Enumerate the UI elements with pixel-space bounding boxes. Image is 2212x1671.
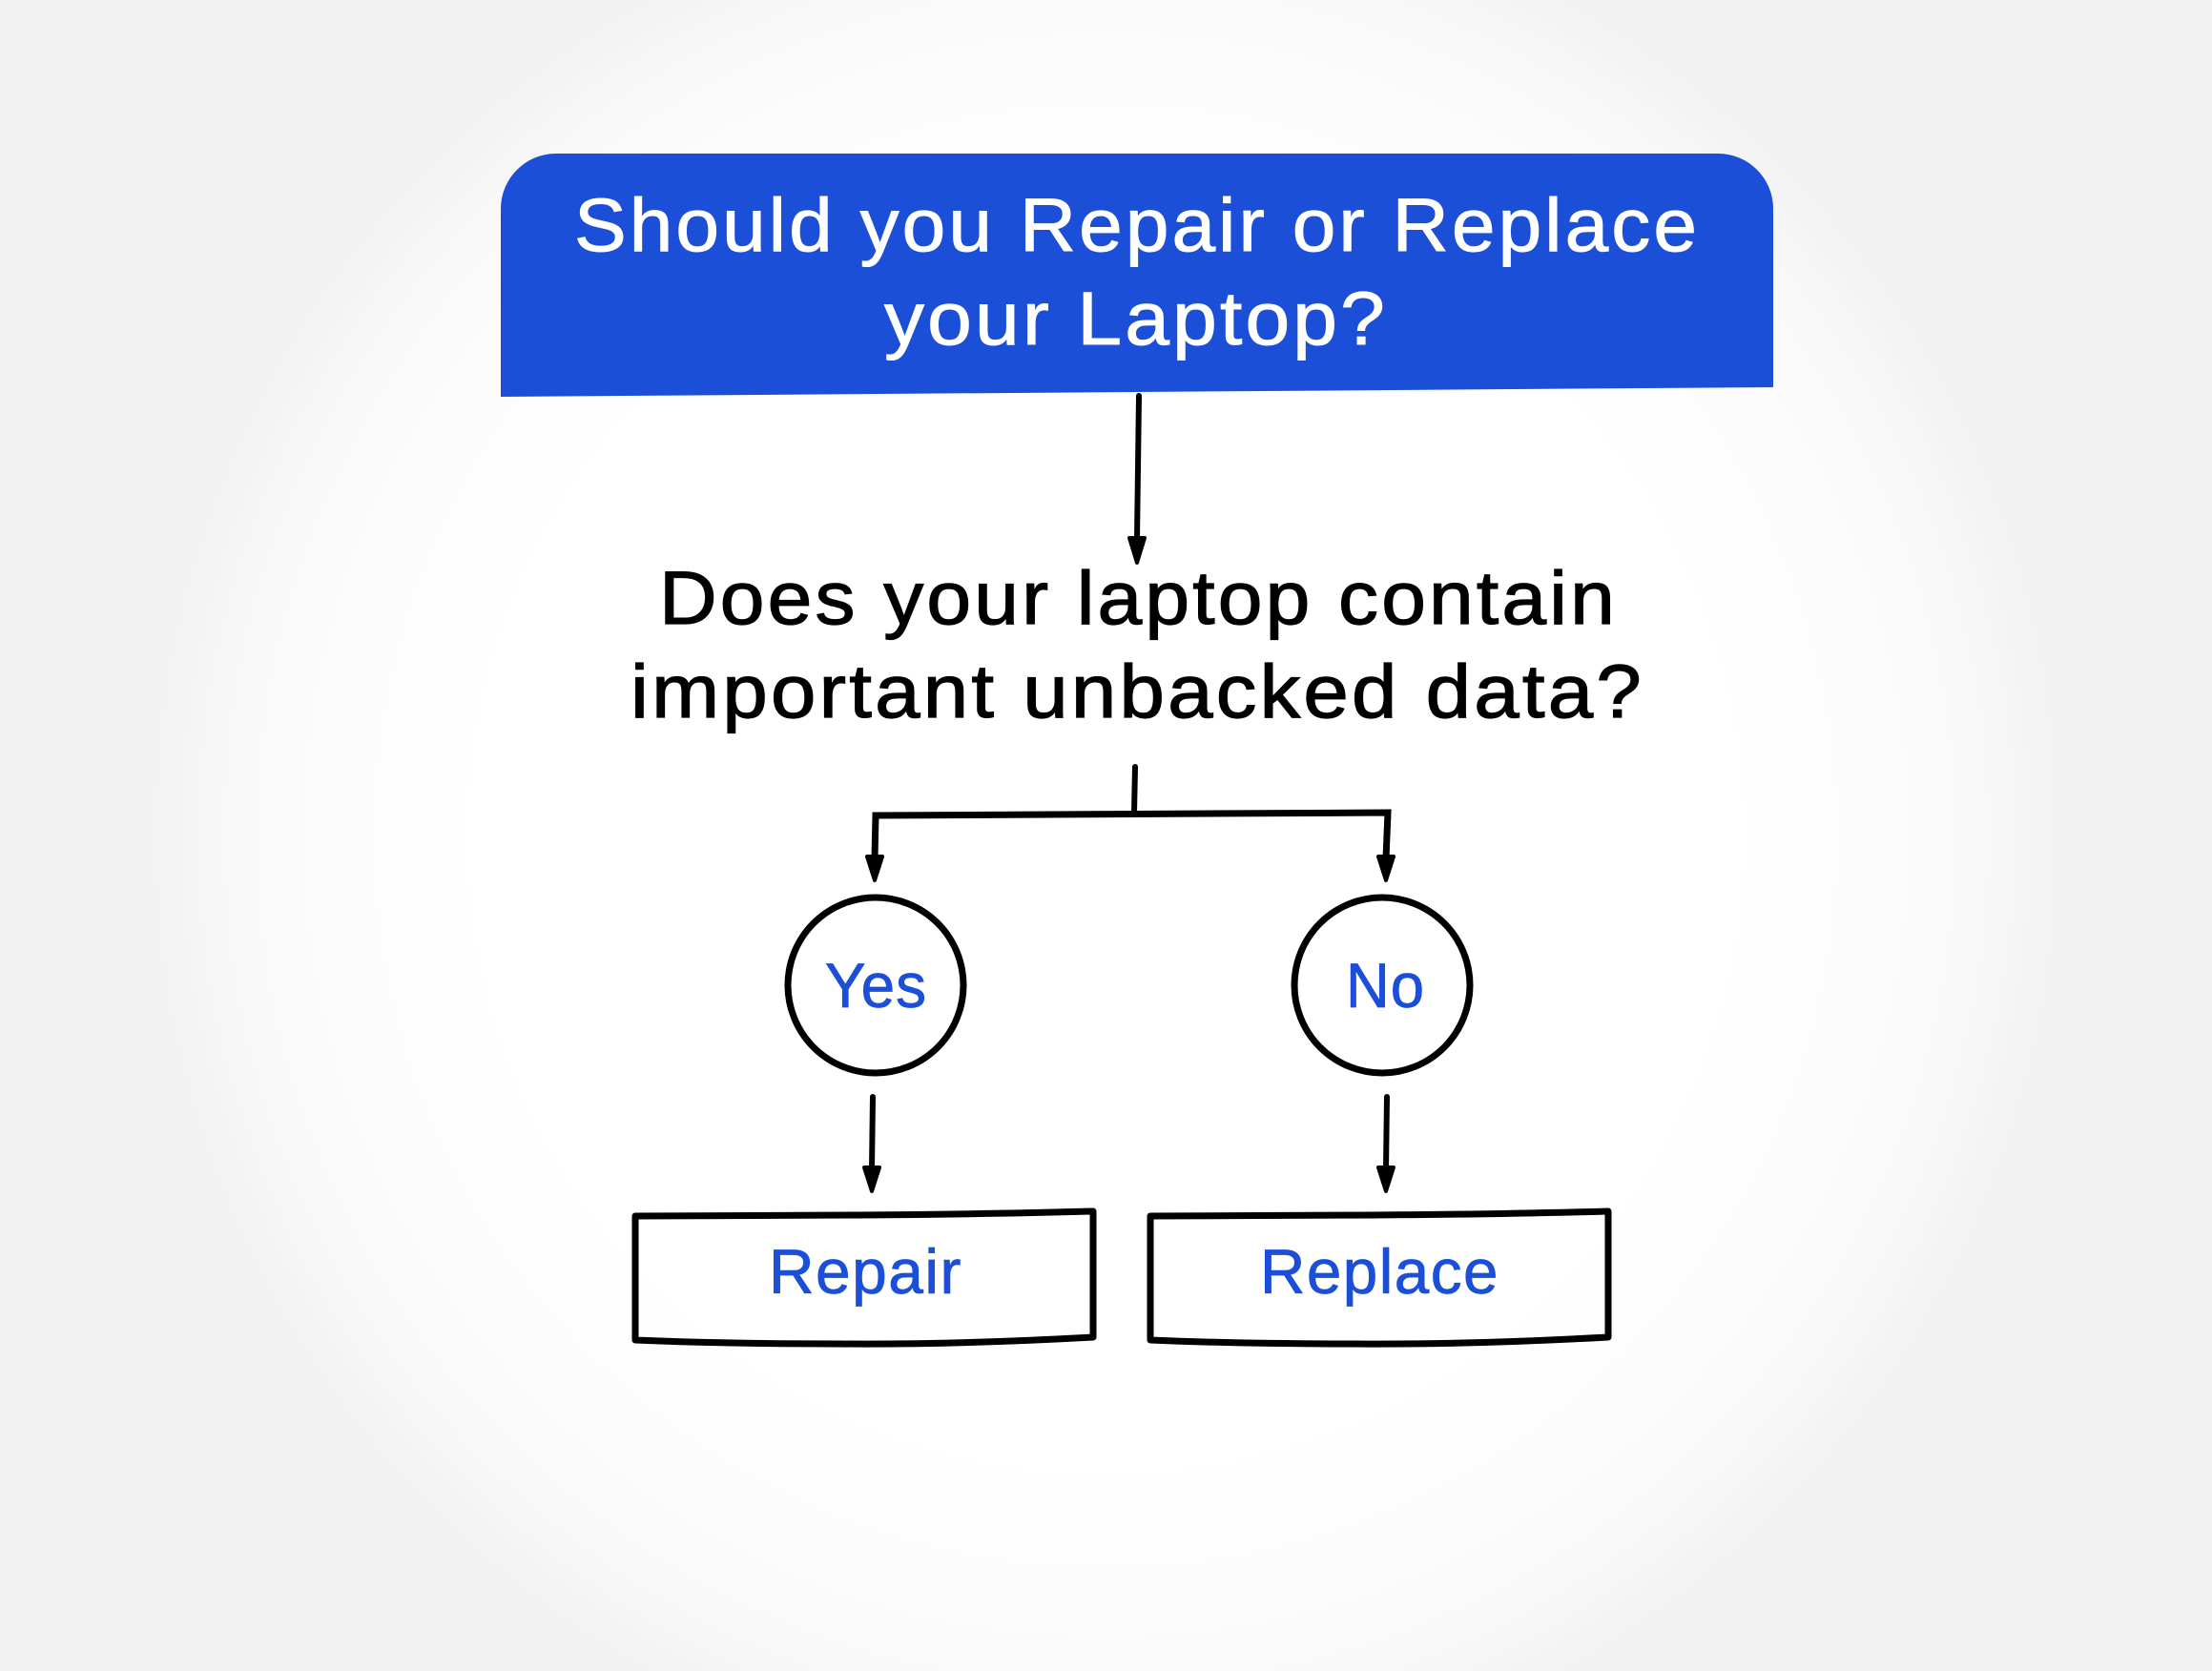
circle: Yes (788, 897, 963, 1073)
arrow: banner to question (1129, 396, 1145, 563)
arrow: No to Replace (1378, 1097, 1394, 1191)
question text: important unbacked data? (631, 649, 1644, 733)
title banner: your Laptop? (884, 276, 1388, 361)
box: Repair (635, 1211, 1093, 1344)
circle: No (1294, 897, 1470, 1073)
title banner (501, 154, 1773, 397)
branch connector with arrows (867, 767, 1394, 880)
box: Replace: Replace (1260, 1236, 1499, 1307)
circle: No: No (1346, 950, 1425, 1021)
question text (631, 555, 1644, 733)
circle: Yes: Yes (825, 950, 927, 1021)
question text: Does your laptop contain (659, 555, 1618, 640)
box: Replace (1150, 1211, 1608, 1344)
title banner: Should you Repair or Replace (574, 182, 1700, 267)
box: Repair: Repair (769, 1236, 962, 1307)
arrow: Yes to Repair (864, 1097, 879, 1191)
